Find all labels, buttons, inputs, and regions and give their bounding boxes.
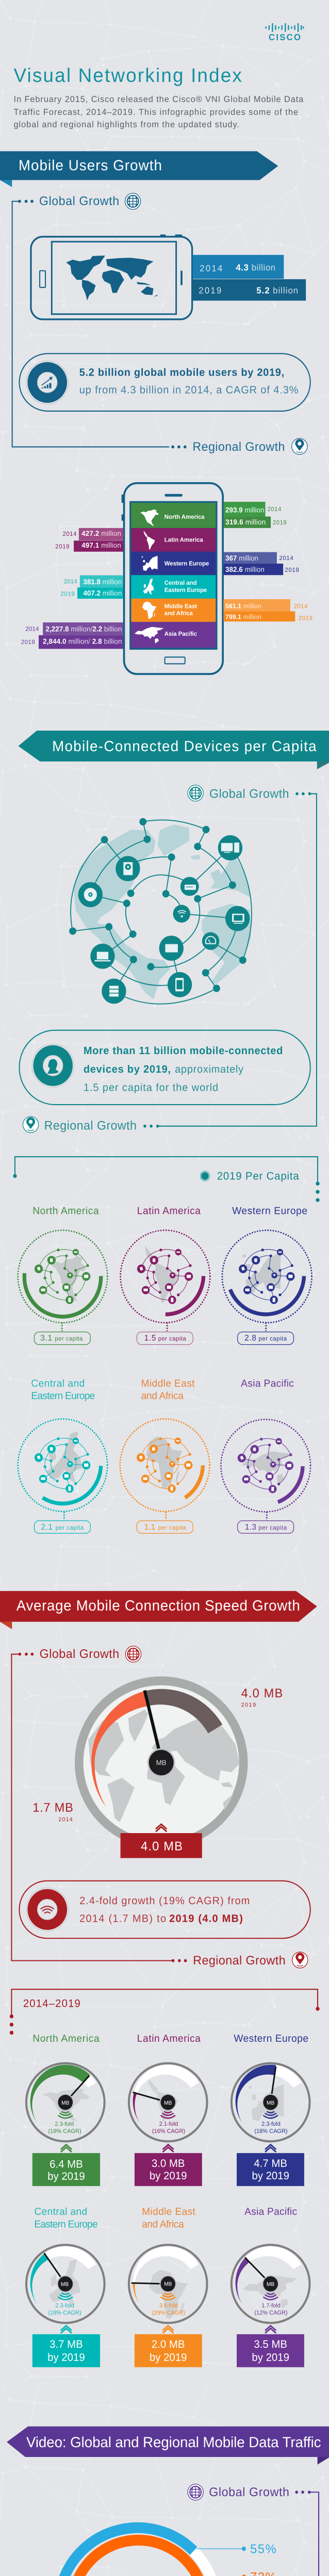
- bars: Middle East and Africa: 2014: [294, 603, 307, 609]
- global growth heading: [188, 785, 309, 801]
- callout: global users: [20, 353, 310, 411]
- banner: mobile-connected devices: Mobile-Connected Devices per Capita: [52, 738, 317, 754]
- panel: North America speed: North America: [32, 2032, 100, 2044]
- icon: wifi: [26, 1888, 68, 1931]
- panel: Middle East and Africa speed: and Africa: [142, 2218, 184, 2230]
- panel: Latin America speed: [129, 2032, 207, 2186]
- panel: Latin America per capita: Latin America: [137, 1205, 201, 1216]
- phone with world map: [31, 234, 192, 319]
- icon: desktop: [218, 835, 242, 860]
- bars: Middle East and Africa: [223, 599, 312, 621]
- panel: Central and Eastern Europe speed: MB: [61, 2281, 69, 2287]
- world map: [66, 256, 158, 300]
- icon: smartphone: [168, 972, 192, 997]
- bars: Central and Eastern Europe: 381.8 million: [83, 578, 122, 586]
- label: 2014 speed: 2014: [58, 1816, 73, 1822]
- share callouts: [196, 2542, 276, 2576]
- icon: wifi: [173, 905, 190, 923]
- icon: modem: [180, 877, 199, 896]
- gauge arcs: [91, 1691, 147, 1807]
- panel: Latin America speed: 2.1-fold: [159, 2121, 178, 2127]
- bars: North America: 293.9 million: [225, 506, 264, 514]
- panel: Asia Pacific per capita: per capita: [258, 1524, 287, 1531]
- regional growth heading: [173, 1952, 308, 1968]
- Cisco logo: [266, 23, 303, 42]
- bars: Western Europe: [223, 552, 299, 575]
- connector line: [11, 1654, 173, 1961]
- label: 2019 speed: 2019: [241, 1701, 256, 1708]
- panel: Middle East and Africa per capita: 1.1: [144, 1522, 155, 1532]
- panel: Middle East and Africa speed: Middle East: [142, 2206, 195, 2217]
- share callouts: 55%: [250, 2542, 276, 2556]
- panel: Latin America per capita: 1.5: [144, 1333, 156, 1343]
- region: North America row: [131, 503, 216, 528]
- panel: Asia Pacific per capita: 1.3: [245, 1522, 256, 1532]
- panel: Western Europe per capita: per capita: [258, 1335, 287, 1342]
- panel: Middle East and Africa speed: 2.0 MB: [152, 2338, 185, 2350]
- global growth heading: Global Growth: [39, 194, 119, 208]
- speed value box: [121, 1824, 202, 1858]
- callout: devices: devices by 2019,: [84, 1063, 171, 1075]
- panel: Middle East and Africa speed: 3.6-fold: [159, 2302, 178, 2309]
- panel: Central and Eastern Europe per capita: [18, 1377, 107, 1533]
- bracket and label: 2014-2019: [11, 1989, 318, 2032]
- panel: Middle East and Africa per capita: [120, 1377, 209, 1533]
- panel: Western Europe speed: [232, 2032, 309, 2186]
- panel: Western Europe speed: Western Europe: [234, 2032, 308, 2044]
- panel: Western Europe speed: 2.3-fold: [261, 2121, 281, 2127]
- panel: North America speed: 6.4 MB: [50, 2158, 83, 2170]
- bars: Western Europe: 382.6 million: [225, 565, 265, 573]
- global growth heading: Global Growth: [209, 2485, 289, 2499]
- panel: Western Europe speed: MB: [267, 2100, 274, 2106]
- banner: mobile-connected devices: [18, 731, 329, 769]
- speed value box: 4.0 MB: [141, 1839, 183, 1853]
- global user bars: 4.3 billion: [236, 262, 275, 273]
- panel: Central and Eastern Europe speed: Eastern Europe: [34, 2218, 98, 2230]
- bars: Latin America: 427.2 million: [81, 529, 121, 537]
- panel: Western Europe speed: (18% CAGR): [254, 2128, 288, 2134]
- bars: Latin America: 497.1 million: [81, 541, 121, 549]
- panel: Central and Eastern Europe per capita: per capita: [56, 1524, 84, 1531]
- panel: Western Europe per capita: 2.8: [244, 1333, 256, 1343]
- icon: tablet: [159, 936, 184, 961]
- regional growth heading: Regional Growth: [44, 1118, 137, 1132]
- region: Central and Eastern Europe row: [131, 575, 216, 599]
- panel: North America speed: MB: [61, 2100, 69, 2106]
- panel: North America speed: [26, 2032, 105, 2186]
- bracket and legend: 2019 per capita: 2019 Per Capita: [217, 1170, 299, 1182]
- panel: North America per capita: North America: [32, 1205, 99, 1216]
- panel: Central and Eastern Europe per capita: 2.1: [41, 1522, 53, 1532]
- video share rings: [59, 2528, 243, 2576]
- banner: mobile users growth: Mobile Users Growth: [19, 157, 162, 174]
- icon: server: [102, 978, 126, 1004]
- panel: Asia Pacific speed: Asia Pacific: [244, 2206, 297, 2217]
- bars: Latin America: 2019: [55, 543, 70, 550]
- needle and hub: MB: [156, 1759, 167, 1767]
- label: 2014 speed: 1.7 MB: [32, 1800, 73, 1815]
- label: 2019 speed: 4.0 MB: [241, 1686, 283, 1700]
- panel: Asia Pacific speed: [232, 2206, 309, 2367]
- gauge world map: [88, 1709, 240, 1822]
- panel: Central and Eastern Europe speed: by 2019: [47, 2351, 85, 2363]
- bracket and label: 2014-2019: 2014–2019: [23, 1997, 80, 2009]
- Cisco logo: CISCO: [269, 32, 301, 42]
- global growth heading: [20, 193, 141, 209]
- regional growth heading: Regional Growth: [193, 1953, 286, 1967]
- region: Asia Pacific row: Asia Pacific: [164, 631, 197, 637]
- callout: speed: 2.4-fold growth (19% CAGR) from: [79, 1895, 250, 1907]
- icon: person: [32, 1044, 74, 1087]
- global user bars: [193, 255, 306, 301]
- global user bars: 2019: [199, 285, 221, 295]
- panel: Middle East and Africa per capita: per capita: [158, 1524, 186, 1531]
- banner: video: [7, 2427, 329, 2465]
- panel: Asia Pacific speed: MB: [267, 2281, 274, 2287]
- bars: Asia Pacific: 2,227.8 million/2.2 billion: [45, 625, 122, 633]
- panel: Middle East and Africa speed: by 2019: [150, 2351, 187, 2363]
- connector line: [12, 201, 169, 447]
- label: 2019 speed: [241, 1686, 283, 1708]
- bars: Central and Eastern Europe: 2019: [60, 590, 75, 597]
- needle and hub: [144, 1690, 175, 1777]
- global growth heading: Global Growth: [209, 787, 289, 801]
- panel: Asia Pacific per capita: [221, 1377, 310, 1533]
- panel: Middle East and Africa speed: MB: [164, 2281, 172, 2287]
- regional growth heading: [173, 438, 307, 454]
- panel: Asia Pacific per capita: Asia Pacific: [241, 1377, 294, 1389]
- panel: Asia Pacific speed: 1.7-fold: [261, 2302, 281, 2309]
- callout: speed: 2014 (1.7 MB) to: [79, 1912, 166, 1924]
- panel: North America per capita: 3.1: [40, 1333, 52, 1343]
- panel: Western Europe per capita: Western Europe: [232, 1205, 307, 1216]
- icon: television: [225, 906, 250, 931]
- region: Middle East and Africa row: Middle East: [164, 603, 197, 609]
- region: Western Europe row: [131, 552, 216, 575]
- device network globe: [71, 820, 252, 1004]
- panel: Central and Eastern Europe per capita: Eastern Europe: [31, 1389, 95, 1401]
- panel: Latin America speed: by 2019: [150, 2170, 187, 2182]
- panel: Latin America per capita: [121, 1205, 210, 1345]
- region: North America row: North America: [164, 514, 205, 520]
- bracket and legend: 2019 per capita: [15, 1157, 318, 1200]
- global growth heading: [188, 2484, 309, 2500]
- bars: Western Europe: 367 million: [225, 554, 258, 562]
- region: Middle East and Africa row: and Africa: [164, 610, 193, 617]
- bars: Asia Pacific: [21, 622, 123, 649]
- panel: Middle East and Africa speed: (29% CAGR): [152, 2309, 185, 2316]
- panel: Central and Eastern Europe speed: [26, 2206, 105, 2367]
- panel: North America per capita: [18, 1205, 107, 1345]
- panel: North America speed: by 2019: [47, 2170, 85, 2182]
- banner: connection speed: Average Mobile Connection Speed Growth: [17, 1597, 300, 1614]
- regional growth heading: Regional Growth: [192, 440, 285, 453]
- intro text: [13, 94, 304, 129]
- callout: devices: [20, 1030, 310, 1105]
- panel: North America speed: 2.3-fold: [55, 2121, 74, 2127]
- icon: laptop: [90, 944, 115, 969]
- banner: mobile users growth: [0, 151, 278, 187]
- panel: Central and Eastern Europe speed: Central and: [34, 2206, 87, 2217]
- global user bars: 5.2 billion: [256, 285, 298, 295]
- bars: Central and Eastern Europe: 2014: [64, 578, 77, 585]
- panel: North America per capita: per capita: [55, 1335, 83, 1342]
- global growth heading: [20, 1646, 141, 1662]
- title: Visual Networking Index: [13, 64, 242, 87]
- intro text: Traffic Forecast, 2014–2019. This infographic provides some of the: [13, 107, 298, 117]
- panel: Latin America speed: (16% CAGR): [152, 2128, 185, 2134]
- panel: Middle East and Africa per capita: and Africa: [141, 1389, 184, 1401]
- panel: Central and Eastern Europe speed: (18% CAGR): [48, 2309, 81, 2316]
- panel: Latin America speed: 3.0 MB: [152, 2157, 185, 2170]
- icon: hard drive: [116, 856, 140, 881]
- section: mobile users growth: [0, 151, 306, 447]
- region: Central and Eastern Europe row: Eastern Europe: [164, 587, 207, 594]
- bars: Asia Pacific: 2014: [25, 625, 39, 632]
- region: Western Europe row: Western Europe: [164, 560, 209, 567]
- callout: speed: [20, 1881, 310, 1938]
- panel: Western Europe speed: 4.7 MB: [254, 2157, 287, 2170]
- bars: Central and Eastern Europe: [60, 575, 123, 599]
- bars: Western Europe: 2019: [285, 566, 299, 573]
- bars: North America: 2014: [268, 506, 281, 513]
- panel: Central and Eastern Europe speed: 2.3-fold: [55, 2302, 74, 2309]
- connector line: [157, 2492, 319, 2576]
- bars: Latin America: [55, 528, 123, 552]
- panel: Latin America speed: MB: [164, 2100, 172, 2106]
- region: Asia Pacific row: [131, 622, 216, 648]
- connector line: [158, 794, 317, 1126]
- intro text: global and regional highlights from the updated study.: [13, 120, 239, 129]
- global growth heading: Global Growth: [40, 1647, 119, 1660]
- bars: North America: [223, 502, 287, 528]
- panel: Asia Pacific speed: by 2019: [252, 2351, 289, 2363]
- bars: Latin America: 2014: [62, 531, 76, 537]
- icon: disc: [78, 882, 103, 907]
- region: Latin America row: Latin America: [164, 536, 203, 543]
- bars: Asia Pacific: 2019: [21, 639, 35, 646]
- region: Middle East and Africa row: [131, 599, 216, 622]
- region: Latin America row: [131, 528, 216, 552]
- network nodes: [73, 822, 243, 988]
- label: 2014 speed: [32, 1800, 73, 1822]
- regional growth heading: [23, 1116, 158, 1132]
- globe land: [74, 824, 251, 999]
- icon: growth chart: [26, 361, 68, 404]
- intro text: In February 2015, Cisco released the Cisco® VNI Global Mobile Data: [13, 94, 304, 104]
- callout: devices: More than 11 billion mobile-connected: [84, 1045, 283, 1057]
- callout: devices: approximately: [175, 1063, 243, 1075]
- callout: global users: 5.2 billion global mobile users by 2019,: [79, 367, 284, 378]
- bars: Middle East and Africa: 561.1 million: [225, 602, 261, 609]
- banner: video: Video: Global and Regional Mobile Data Traffic: [26, 2434, 321, 2450]
- bars: Asia Pacific: 2,844.0 million/ 2.8 billion: [43, 637, 122, 646]
- bars: North America: 319.6 million: [225, 518, 266, 526]
- panel: Middle East and Africa per capita: Middle East: [141, 1377, 195, 1389]
- region: Central and Eastern Europe row: Central and: [164, 580, 197, 586]
- bars: Middle East and Africa: 2019: [298, 615, 312, 621]
- panel: Western Europe per capita: [222, 1205, 312, 1345]
- global user bars: 2014: [200, 263, 222, 273]
- panel: Asia Pacific speed: 3.5 MB: [254, 2338, 287, 2350]
- panel: Western Europe speed: by 2019: [252, 2170, 289, 2182]
- panel: Latin America per capita: per capita: [158, 1335, 186, 1342]
- bars: Central and Eastern Europe: 407.2 million: [83, 589, 122, 597]
- panel: North America speed: (18% CAGR): [48, 2128, 81, 2134]
- callout: global users: up from 4.3 billion in 2014, a CAGR of 4.3%: [79, 384, 298, 396]
- bars: Middle East and Africa: 799.1 million: [225, 613, 261, 620]
- callout: speed: 2019 (4.0 MB): [169, 1912, 243, 1924]
- panel: Asia Pacific speed: (12% CAGR): [254, 2309, 288, 2316]
- regional phone: [122, 483, 223, 674]
- bars: Western Europe: 2014: [279, 555, 293, 562]
- panel: Central and Eastern Europe speed: 3.7 MB: [50, 2338, 83, 2350]
- panel: Central and Eastern Europe per capita: Central and: [31, 1377, 85, 1389]
- network links: [71, 820, 252, 1004]
- panel: Latin America speed: Latin America: [137, 2032, 201, 2044]
- panel: Middle East and Africa speed: [129, 2206, 207, 2367]
- icon: speedometer: [202, 932, 219, 950]
- banner: connection speed: [0, 1591, 317, 1629]
- speedometer globe: [79, 1681, 243, 1844]
- callout: devices: 1.5 per capita for the world: [84, 1081, 218, 1093]
- bars: North America: 2019: [273, 519, 287, 526]
